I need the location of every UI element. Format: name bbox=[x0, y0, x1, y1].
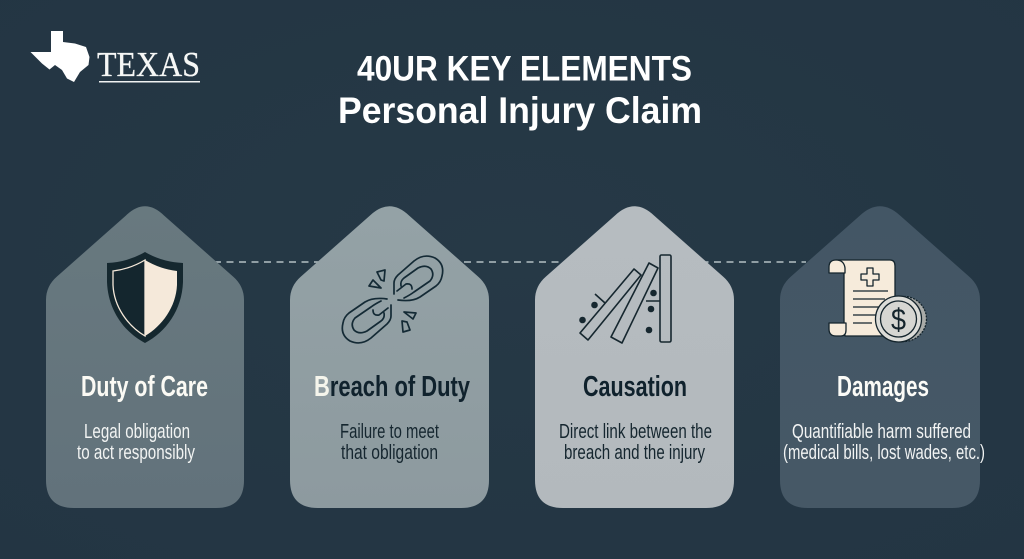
card description: Legal obligation bbox=[84, 421, 190, 443]
card description bbox=[340, 421, 439, 464]
title line 2: Personal Injury Claim bbox=[338, 90, 702, 131]
card description bbox=[559, 421, 712, 464]
card shape bbox=[290, 206, 489, 508]
card description: Failure to meet bbox=[340, 421, 439, 443]
logo underline bbox=[99, 81, 200, 82]
title bbox=[338, 50, 702, 131]
icon: medical bill and coin bbox=[829, 260, 926, 342]
dashed connector line bbox=[214, 261, 806, 263]
panel: Causation bbox=[535, 206, 734, 508]
card heading: Damages bbox=[837, 371, 929, 403]
card shape bbox=[535, 206, 734, 508]
card heading: Breach of Duty bbox=[314, 371, 470, 403]
icon: Texas state silhouette bbox=[30, 31, 90, 82]
panel: Duty of Care bbox=[46, 206, 244, 508]
card description: Quantifiable harm suffered bbox=[792, 421, 971, 443]
card description: breach and the injury bbox=[564, 442, 705, 464]
logo wordmark: TEXAS bbox=[97, 45, 200, 84]
card description bbox=[783, 421, 985, 464]
icon: broken chain bbox=[342, 256, 443, 343]
card shape bbox=[46, 206, 244, 508]
card heading: Causation bbox=[583, 371, 687, 403]
panel: Damages bbox=[780, 206, 985, 508]
card shape bbox=[780, 206, 980, 508]
card description: that obligation bbox=[341, 442, 438, 464]
card description: to act responsibly bbox=[77, 442, 195, 464]
card description bbox=[77, 421, 195, 464]
icon: shield bbox=[107, 252, 183, 343]
title line 1: 40UR KEY ELEMENTS bbox=[357, 50, 692, 88]
card heading: Duty of Care bbox=[81, 371, 208, 403]
panel: Breach of Duty bbox=[290, 206, 489, 508]
dollar sign: $ bbox=[891, 302, 906, 337]
icon: falling dominoes bbox=[579, 255, 671, 343]
logo: Texas bbox=[30, 31, 200, 84]
card description: Direct link between the bbox=[559, 421, 712, 443]
